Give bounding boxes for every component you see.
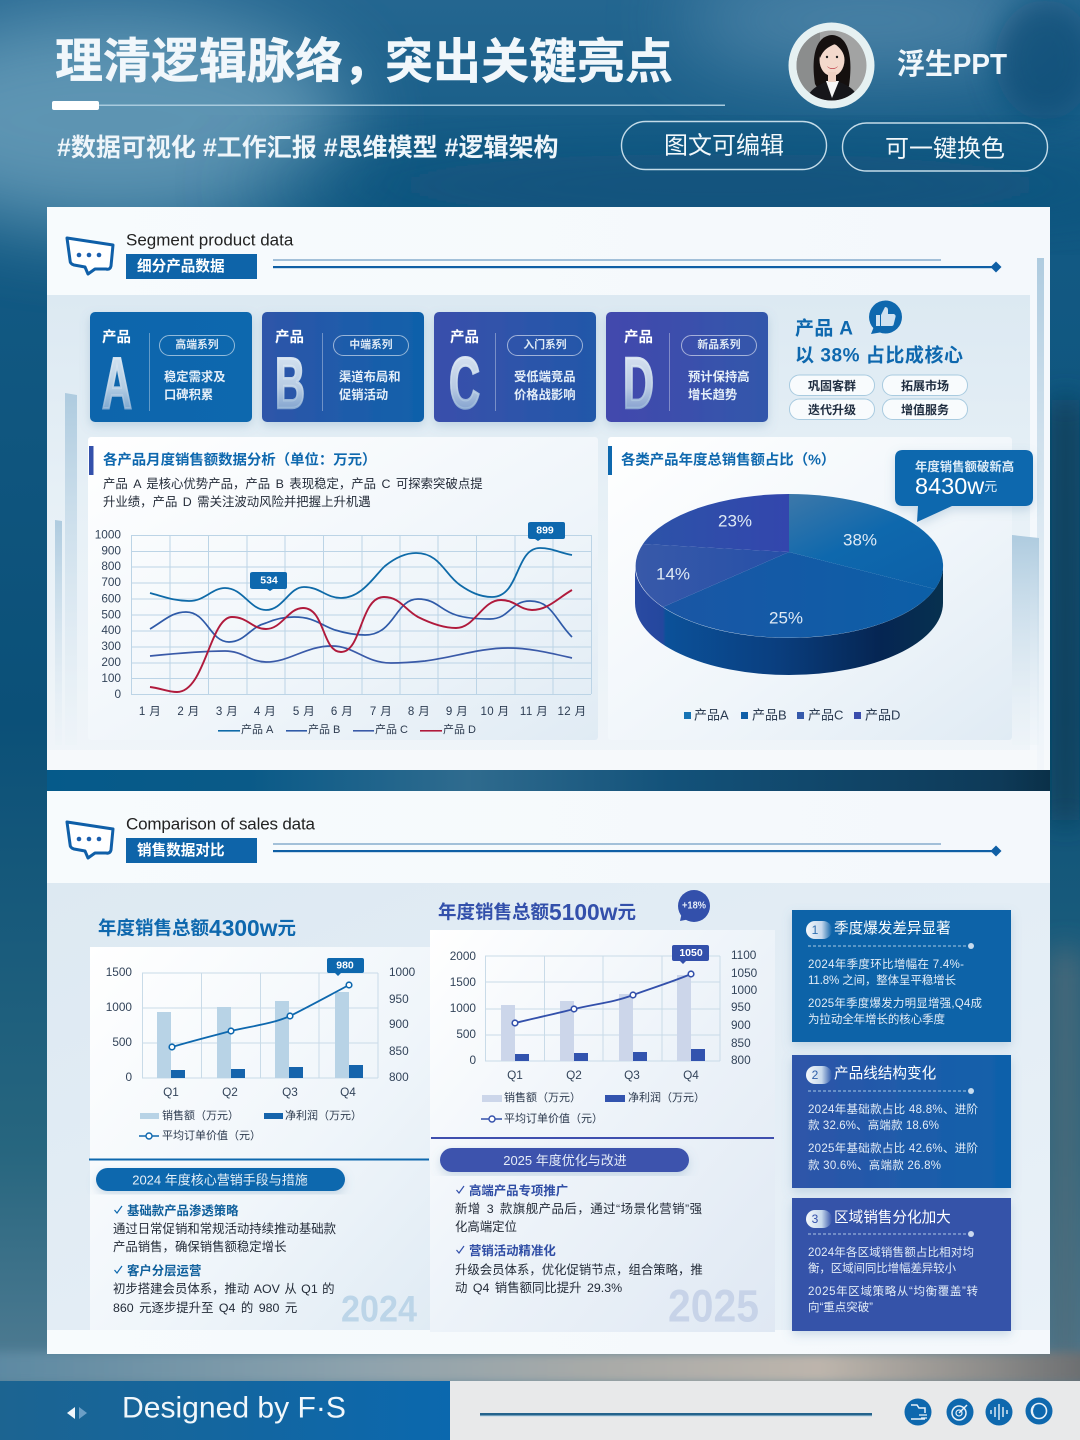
2024 measure list: 通过日常促销和常规活动持续推动基础款 bbox=[113, 1221, 337, 1236]
line chart plot: 10 月 bbox=[480, 706, 510, 718]
line chart plot: 500 bbox=[101, 608, 121, 622]
insight card 2: 款 30.6%、高端款 26.8% bbox=[808, 1158, 941, 1172]
insight card 1: 11.8% 之间，整体呈平稳增长 bbox=[808, 973, 956, 987]
icon: speech bubble bbox=[67, 822, 113, 858]
number badge 2: 2 bbox=[812, 1068, 819, 1082]
footer rule bbox=[480, 1413, 872, 1416]
data label 534: 534 bbox=[260, 574, 278, 586]
insight card 1: 2024年季度环比增幅在 7.4%- bbox=[808, 957, 964, 971]
card: product C: C bbox=[449, 344, 480, 424]
author name: 浮生PPT bbox=[897, 48, 1007, 81]
insight card 2 bbox=[792, 1055, 1011, 1188]
card: product C: 产品 bbox=[450, 329, 479, 346]
chart description bbox=[103, 476, 483, 509]
card: product B: 渠道布局和 bbox=[339, 369, 400, 384]
2024 legend: 销售额（万元） bbox=[162, 1108, 239, 1122]
header title: 突出关键亮点 bbox=[385, 36, 673, 88]
line legend bbox=[218, 722, 476, 736]
heading rule with diamond bbox=[273, 260, 1002, 272]
card: product D bbox=[606, 312, 768, 424]
arrows bbox=[67, 1407, 87, 1419]
card: product D: 预计保持高 bbox=[688, 369, 750, 384]
tag pills bbox=[790, 375, 968, 420]
line chart plot: 9 月 bbox=[446, 706, 468, 718]
number badge 1: 1 bbox=[812, 923, 819, 937]
2025 combo chart: 850 bbox=[731, 1036, 751, 1050]
data label 534 bbox=[250, 572, 287, 591]
card: product C: 入门系列 bbox=[523, 337, 567, 351]
line chart plot: 6 月 bbox=[331, 706, 353, 718]
line chart plot: 5 月 bbox=[293, 706, 315, 718]
line chart plot: 400 bbox=[101, 623, 121, 637]
card: product D: 产品 bbox=[624, 329, 653, 346]
line chart plot: 800 bbox=[101, 559, 121, 573]
card: product B: 产品 bbox=[275, 329, 304, 346]
button: recolor: 可一键换色 bbox=[885, 136, 1005, 162]
insight card 2: 2024年基础款占比 48.8%、进阶 bbox=[808, 1102, 978, 1116]
2024 measures pill bbox=[96, 1168, 345, 1191]
tag pills: 迭代升级 bbox=[808, 402, 856, 417]
2025 improvement list: 营销活动精准化 bbox=[469, 1243, 556, 1258]
callout: product A core bbox=[795, 318, 963, 366]
card: product A: 产品 bbox=[102, 329, 131, 346]
2025 improvement list bbox=[455, 1183, 703, 1295]
data label 1050: 1050 bbox=[679, 947, 703, 959]
tag pills: 拓展市场 bbox=[901, 378, 949, 393]
panel: 2025 bbox=[430, 930, 775, 1332]
2025 improvements pill: 2025 年度优化与改进 bbox=[503, 1153, 627, 1168]
2024 combo chart: 0 bbox=[125, 1070, 132, 1084]
panel: comparison of sales data bbox=[0, 791, 1080, 1440]
tag pills: 增值服务 bbox=[901, 402, 949, 417]
panel: 2024 bbox=[89, 947, 430, 1330]
card: product A: A bbox=[102, 344, 132, 424]
card: product A: 口碑积累 bbox=[164, 387, 213, 402]
line legend: 产品 A bbox=[241, 722, 274, 736]
heading: 2024 total: 年度销售总额4300w元 bbox=[98, 915, 296, 941]
card: product A: 高端系列 bbox=[175, 337, 219, 351]
3D pie chart: 38% bbox=[843, 530, 877, 550]
2025 combo chart: Q2 bbox=[566, 1068, 582, 1082]
icon: sound wave bbox=[986, 1398, 1012, 1426]
2025 combo chart: 1100 bbox=[731, 948, 757, 962]
2025 improvement list: 新增 3 款旗舰产品后，通过“场景化营销”强 bbox=[455, 1201, 702, 1216]
2025 combo chart: Q4 bbox=[683, 1068, 699, 1082]
callout: annual sales record: 年度销售额破新高 bbox=[915, 459, 1014, 474]
line chart plot: 200 bbox=[101, 655, 121, 669]
line chart plot: 1 月 bbox=[139, 706, 161, 718]
badge: +18% bbox=[678, 890, 710, 922]
2025 legend: 销售额（万元） bbox=[504, 1090, 581, 1104]
insight card 3: 区域销售分化加大 bbox=[834, 1209, 951, 1226]
button: recolor bbox=[842, 123, 1048, 171]
card: product A: 稳定需求及 bbox=[164, 369, 226, 384]
2025 combo chart: 900 bbox=[731, 1018, 751, 1032]
section heading label bbox=[126, 838, 257, 863]
insight card 3: 向“重点突破” bbox=[808, 1300, 873, 1314]
2025 watermark: 2025 bbox=[668, 1280, 759, 1332]
2025 improvement list: 动 Q4 销售额同比提升 29.3% bbox=[455, 1280, 622, 1295]
pie legend: 产品C bbox=[808, 708, 843, 722]
2025 improvement list: 高端产品专项推广 bbox=[469, 1183, 568, 1198]
line chart plot: 300 bbox=[101, 639, 121, 653]
2024 combo chart: Q3 bbox=[282, 1085, 298, 1099]
callout: product A core: 以 38% 占比成核心 bbox=[795, 344, 963, 366]
2025 combo chart: 950 bbox=[731, 1000, 751, 1014]
line legend: 产品 C bbox=[375, 722, 408, 736]
line chart plot: 700 bbox=[101, 575, 121, 589]
button: editable: 图文可编辑 bbox=[664, 132, 784, 160]
2025 legend bbox=[481, 1090, 705, 1125]
insight card 1: 2025年季度爆发力明显增强,Q4成 bbox=[808, 996, 982, 1010]
tag pills: 巩固客群 bbox=[808, 378, 856, 393]
2025 combo chart: 1000 bbox=[450, 1001, 476, 1015]
icon: ring bbox=[1026, 1398, 1052, 1424]
insight card 1 bbox=[792, 910, 1011, 1042]
card: product A bbox=[90, 312, 252, 424]
pie legend: 产品D bbox=[865, 708, 900, 722]
line chart plot: 8 月 bbox=[408, 706, 430, 718]
insight card 1: 为拉动全年增长的核心季度 bbox=[808, 1012, 946, 1026]
2024 measure list: 基础款产品渗透策略 bbox=[127, 1203, 239, 1218]
line legend: 产品 B bbox=[308, 722, 340, 736]
2025 combo chart bbox=[450, 945, 758, 1125]
card: product C: 价格战影响 bbox=[514, 387, 576, 402]
card: product D: D bbox=[623, 344, 654, 424]
number badge 3: 3 bbox=[812, 1212, 819, 1226]
2025 legend: 平均订单价值（元） bbox=[504, 1112, 603, 1125]
2024 legend: 平均订单价值（元） bbox=[162, 1129, 261, 1142]
card: product B: B bbox=[275, 344, 305, 424]
hashtags: #数据可视化 #工作汇报 #思维模型 #逻辑架构 bbox=[57, 134, 558, 162]
number badge 1 bbox=[806, 921, 832, 939]
2025 combo chart: Q3 bbox=[624, 1068, 640, 1082]
panel: annual share pie bbox=[608, 437, 1012, 740]
icon: speech bubble bbox=[67, 238, 113, 274]
number badge 2 bbox=[806, 1066, 832, 1084]
2025 combo chart: 2000 bbox=[450, 949, 476, 963]
section heading label bbox=[126, 254, 257, 279]
callout: annual sales record: 8430w元 bbox=[915, 473, 997, 499]
line chart plot: 12 月 bbox=[557, 706, 587, 718]
data label 1050 bbox=[672, 945, 709, 964]
2024 measures pill: 2024 年度核心营销手段与措施 bbox=[132, 1172, 308, 1188]
2025 improvement list: 化高端定位 bbox=[455, 1219, 517, 1234]
insight card 2: 2025年基础款占比 42.6%、进阶 bbox=[808, 1141, 978, 1155]
line chart plot: 100 bbox=[101, 671, 121, 685]
icon: thumbs up bbox=[869, 300, 902, 334]
line chart plot: 1000 bbox=[95, 528, 121, 542]
section heading english: Segment product data bbox=[126, 230, 294, 250]
header title: 理清逻辑脉络， bbox=[55, 36, 391, 88]
data label 980: 980 bbox=[336, 960, 354, 972]
2025 combo chart: 1500 bbox=[450, 975, 476, 989]
pie heading: 各类产品年度总销售额占比（%） bbox=[621, 450, 835, 468]
2025 legend: 净利润（万元） bbox=[628, 1090, 705, 1104]
2024 measure list: 客户分层运营 bbox=[127, 1263, 201, 1278]
line chart plot: 0 bbox=[114, 687, 121, 701]
insight card 3: 2025年区域策略从“均衡覆盖”转 bbox=[808, 1284, 978, 1298]
line chart plot: 11 月 bbox=[520, 706, 548, 718]
line chart plot bbox=[95, 522, 592, 736]
card: product C bbox=[434, 312, 596, 424]
card: product D: 增长趋势 bbox=[688, 387, 737, 402]
chart description: 产品 A 是核心优势产品，产品 B 表现稳定，产品 C 可探索突破点提 bbox=[103, 476, 483, 491]
2025 improvement list: 升级会员体系，优化促销节点，组合策略，推 bbox=[455, 1262, 703, 1277]
insight card 2: 款 32.6%、高端款 18.6% bbox=[808, 1118, 939, 1132]
2024 measure list: 产品销售，确保销售额稳定增长 bbox=[113, 1239, 286, 1254]
footer credit: Designed by F·S bbox=[122, 1392, 346, 1424]
3D pie chart: 14% bbox=[656, 564, 690, 584]
2024 measure list: 初步搭建会员体系，推动 AOV 从 Q1 的 bbox=[113, 1281, 335, 1296]
card: product D: 新品系列 bbox=[697, 337, 741, 351]
2025 combo chart: 1000 bbox=[731, 983, 758, 997]
insight card 1: 季度爆发差异显著 bbox=[834, 920, 951, 937]
card: product C: 受低端竞品 bbox=[514, 369, 576, 384]
section heading label: 细分产品数据 bbox=[137, 257, 225, 275]
2025 combo chart: 500 bbox=[456, 1027, 476, 1041]
heading rule with diamond bbox=[273, 844, 1002, 856]
insight card 3: 衡，区域间同比增幅差异较小 bbox=[808, 1261, 956, 1275]
title underline bbox=[52, 101, 725, 110]
data label 899 bbox=[528, 522, 565, 541]
2024 measure list: 860 元逐步提升至 Q4 的 980 元 bbox=[113, 1300, 297, 1315]
3D pie chart: 23% bbox=[718, 512, 752, 530]
2024 legend: 净利润（万元） bbox=[285, 1108, 362, 1122]
line chart plot: 900 bbox=[101, 544, 121, 558]
3D pie chart: 25% bbox=[769, 608, 803, 628]
footer bar bbox=[0, 1381, 1080, 1440]
card: product B: 促销活动 bbox=[339, 387, 388, 402]
icon: folder bbox=[904, 1398, 932, 1426]
line chart plot: 4 月 bbox=[254, 706, 276, 718]
2024 combo chart bbox=[106, 958, 416, 1142]
insight card 2: 产品线结构变化 bbox=[834, 1065, 937, 1082]
line chart plot: 2 月 bbox=[177, 706, 200, 718]
2024 combo chart: Q2 bbox=[222, 1085, 238, 1099]
data label 980 bbox=[327, 958, 364, 976]
2024 watermark: 2024 bbox=[341, 1288, 417, 1330]
pie legend: 产品B bbox=[752, 708, 787, 722]
panel: monthly sales line chart bbox=[88, 437, 598, 740]
2024 combo chart: 1000 bbox=[389, 965, 416, 979]
pie legend: 产品A bbox=[694, 708, 729, 722]
2024 combo chart: 900 bbox=[389, 1017, 409, 1031]
2024 combo chart: 950 bbox=[389, 992, 409, 1006]
card: product B bbox=[262, 312, 424, 424]
2024 combo chart: 850 bbox=[389, 1044, 409, 1058]
data label 899: 899 bbox=[536, 524, 554, 536]
2025 combo chart: Q1 bbox=[507, 1068, 523, 1082]
icon: target bbox=[946, 1398, 974, 1426]
line chart plot: 600 bbox=[101, 592, 121, 606]
2024 combo chart: Q4 bbox=[340, 1085, 356, 1099]
2024 measure list bbox=[113, 1203, 337, 1315]
chart description: 升业绩，产品 D 需关注波动风险并把握上升机遇 bbox=[103, 494, 371, 509]
header title bbox=[55, 36, 673, 88]
button: editable bbox=[622, 122, 826, 170]
2024 combo chart: 800 bbox=[389, 1070, 409, 1084]
2024 combo chart: 1000 bbox=[106, 1000, 132, 1014]
badge: +18%: +18% bbox=[682, 900, 706, 912]
pie legend bbox=[684, 708, 900, 722]
section heading label: 销售数据对比 bbox=[137, 841, 225, 859]
2025 combo chart: 1050 bbox=[731, 966, 758, 980]
chart heading: 各产品月度销售额数据分析（单位：万元） bbox=[103, 450, 376, 468]
section heading english: Comparison of sales data bbox=[126, 814, 316, 834]
callout: annual sales record bbox=[895, 450, 1033, 522]
card: product B: 中端系列 bbox=[349, 337, 393, 351]
2025 combo chart: 0 bbox=[469, 1053, 476, 1067]
avatar portrait bbox=[788, 22, 874, 108]
heading: 2025 total: 年度销售总额5100w元 bbox=[438, 899, 636, 925]
panel: segment product data bbox=[47, 207, 1050, 770]
2025 combo chart: 800 bbox=[731, 1053, 751, 1067]
insight card 3 bbox=[792, 1198, 1011, 1331]
2024 legend bbox=[139, 1108, 362, 1142]
number badge 3 bbox=[806, 1210, 832, 1228]
2024 combo chart: 1500 bbox=[106, 965, 132, 979]
3D pie chart bbox=[635, 494, 943, 675]
2024 combo chart: 500 bbox=[112, 1035, 132, 1049]
2024 combo chart: Q1 bbox=[163, 1085, 179, 1099]
line chart plot: 3 月 bbox=[216, 706, 238, 718]
line chart plot: 7 月 bbox=[370, 706, 392, 718]
line legend: 产品 D bbox=[443, 722, 476, 736]
2025 improvements pill bbox=[440, 1148, 689, 1172]
callout: product A core: 产品 A bbox=[795, 318, 853, 340]
insight card 3: 2024年各区域销售额占比相对均 bbox=[808, 1245, 974, 1259]
